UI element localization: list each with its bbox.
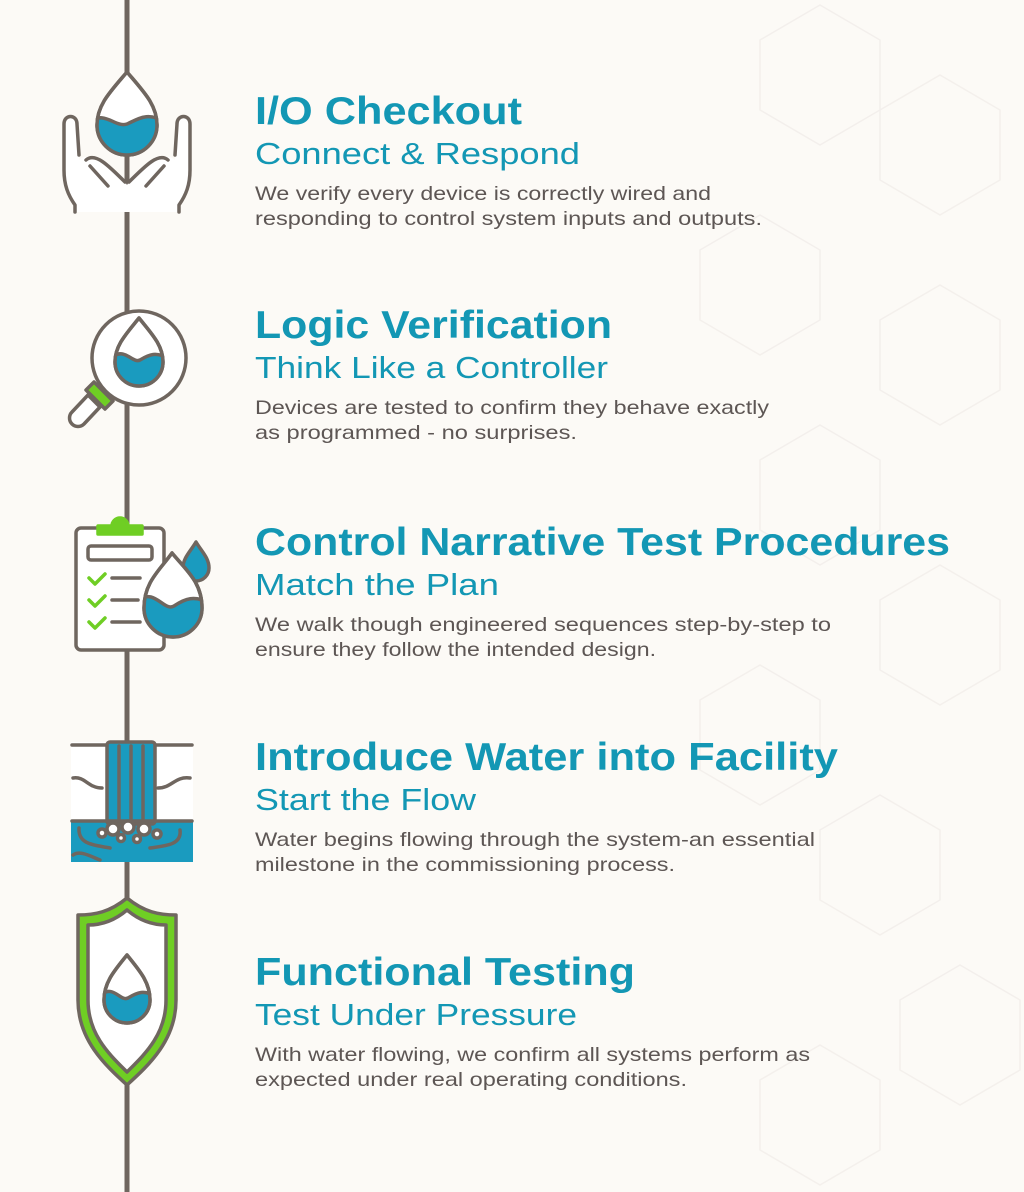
section 1 text: responding to control system inputs and outputs. xyxy=(255,208,762,230)
section 1 text: We verify every device is correctly wired and xyxy=(255,183,711,205)
section 5 text: expected under real operating conditions. xyxy=(255,1069,687,1091)
icon: hands with drop xyxy=(64,72,190,212)
section 2 text xyxy=(255,304,769,444)
section 3 text: ensure they follow the intended design. xyxy=(255,639,656,661)
section 5 text xyxy=(255,951,810,1091)
section 4 text: Start the Flow xyxy=(255,782,477,817)
section 3 text xyxy=(255,521,950,661)
section 2 text: Logic Verification xyxy=(255,304,612,347)
section 5 text: With water flowing, we confirm all systems perform as xyxy=(255,1044,810,1066)
icon: magnifier with drop xyxy=(70,311,186,426)
section 3 text: Control Narrative Test Procedures xyxy=(255,521,950,564)
section 2 text: Think Like a Controller xyxy=(255,350,608,385)
section 1 text: Connect & Respond xyxy=(255,136,580,171)
section 4 text: Water begins flowing through the system-an essential xyxy=(255,829,815,851)
section 1 text xyxy=(255,90,762,230)
icon: waterfall xyxy=(71,742,193,862)
section 4 text: milestone in the commissioning process. xyxy=(255,854,675,876)
section 1 text: I/O Checkout xyxy=(255,90,522,133)
section 4 text xyxy=(255,736,838,876)
icon: clipboard with drops xyxy=(76,518,209,650)
section 4 text: Introduce Water into Facility xyxy=(255,736,838,779)
section 2 text: as programmed - no surprises. xyxy=(255,422,577,444)
section 3 text: We walk though engineered sequences step-by-step to xyxy=(255,614,831,636)
icon: shield with drop xyxy=(78,898,176,1085)
section 2 text: Devices are tested to confirm they behave exactly xyxy=(255,397,769,419)
section 5 text: Test Under Pressure xyxy=(255,997,577,1032)
section 3 text: Match the Plan xyxy=(255,567,499,602)
section 5 text: Functional Testing xyxy=(255,951,635,994)
timeline line xyxy=(124,0,130,1192)
